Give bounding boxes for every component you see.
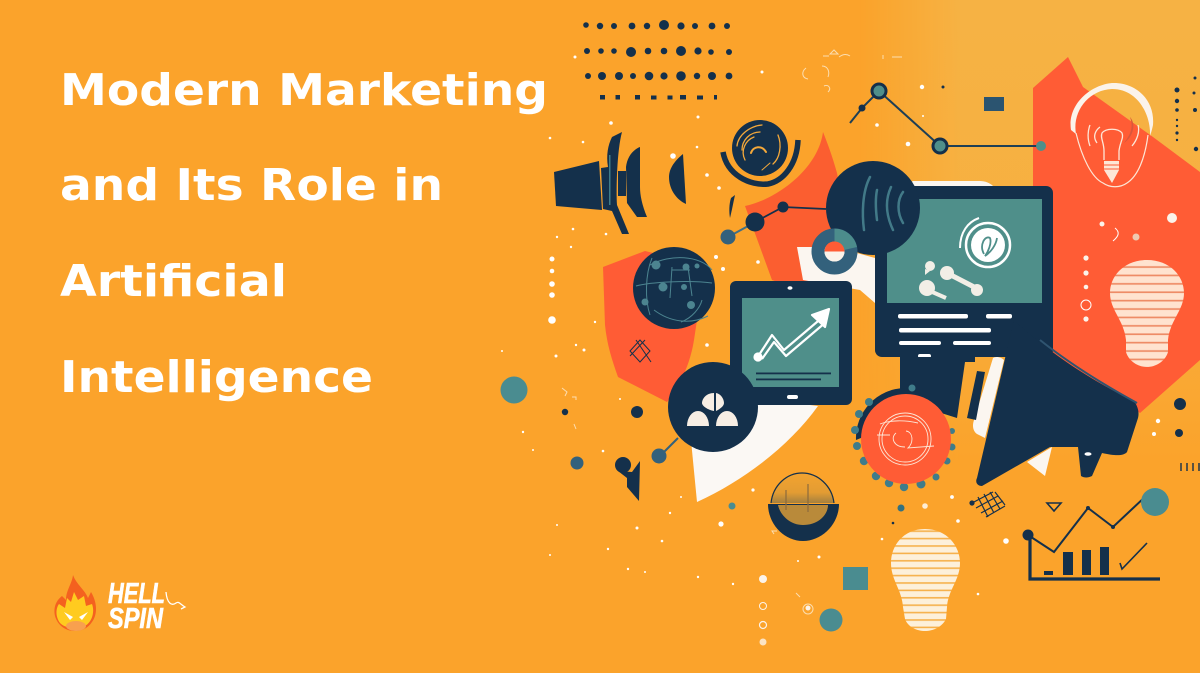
logo wordmark: HELL <box>108 578 165 610</box>
monitor stand <box>900 357 975 418</box>
icon: striped bulb on red <box>1110 260 1184 367</box>
icon: gear <box>851 384 956 491</box>
icon: donut <box>818 228 857 268</box>
monitor text lines <box>898 314 1012 358</box>
devil tail <box>166 592 185 609</box>
background <box>894 0 1200 380</box>
icon: globe <box>633 247 715 329</box>
icon: striped bulb lower <box>891 529 960 631</box>
logo: Hell Spin <box>54 575 185 635</box>
tablet <box>730 281 852 405</box>
title: Artificial <box>60 256 287 307</box>
monitor nodes icon <box>919 261 983 298</box>
shape: red centre panel <box>745 132 850 290</box>
icon: analytics badge <box>652 362 758 464</box>
chart bars <box>1044 547 1109 575</box>
shape: white top of monitor <box>905 181 993 186</box>
chart trend line <box>1028 495 1147 552</box>
monitor screen <box>887 199 1042 303</box>
megaphone white band <box>973 357 1004 438</box>
monitor spiral icon <box>960 218 1010 267</box>
icon: spiral <box>723 120 798 184</box>
icon: half bowl <box>768 473 839 541</box>
shape: red left panel <box>603 251 700 402</box>
logo wordmark: SPIN <box>108 603 164 635</box>
title: Modern Marketing <box>60 65 548 116</box>
tablet rising chart <box>754 309 829 360</box>
round speaker badge <box>826 161 920 255</box>
icon: flame <box>54 575 96 631</box>
shape: red right panel <box>1033 57 1200 413</box>
tablet screen <box>742 298 839 387</box>
outlined white circles bottom <box>759 575 810 646</box>
icon: hatch grid lower <box>970 492 1005 517</box>
tick marks right <box>1181 463 1199 471</box>
shape: white centre panel <box>797 247 875 303</box>
chart check mark <box>1120 543 1147 569</box>
line and bar chart lower right <box>1022 488 1169 579</box>
network line top <box>850 84 1046 153</box>
big monitor <box>875 186 1053 418</box>
chart triangle <box>1047 503 1061 511</box>
faint white marks <box>562 50 902 614</box>
logo wordmark <box>108 578 165 635</box>
icon: lightbulb outline <box>1071 83 1153 187</box>
network line left <box>720 195 826 244</box>
white speckles <box>501 56 1160 595</box>
shape: white lower wedge <box>690 395 818 502</box>
teal circles and squares <box>500 376 904 632</box>
navy square <box>984 97 1004 111</box>
title: Intelligence <box>60 352 373 403</box>
chart axes <box>1030 533 1160 579</box>
icon: speaker left <box>554 132 686 234</box>
dot grid <box>583 20 732 100</box>
icon: hatch marks red panel <box>630 340 651 362</box>
megaphone <box>967 320 1139 486</box>
decor on red panel <box>1081 213 1177 322</box>
title: and Its Role in <box>60 160 443 211</box>
tablet text lines <box>756 372 831 374</box>
title <box>60 65 548 403</box>
navy dots and heart <box>562 76 1198 524</box>
